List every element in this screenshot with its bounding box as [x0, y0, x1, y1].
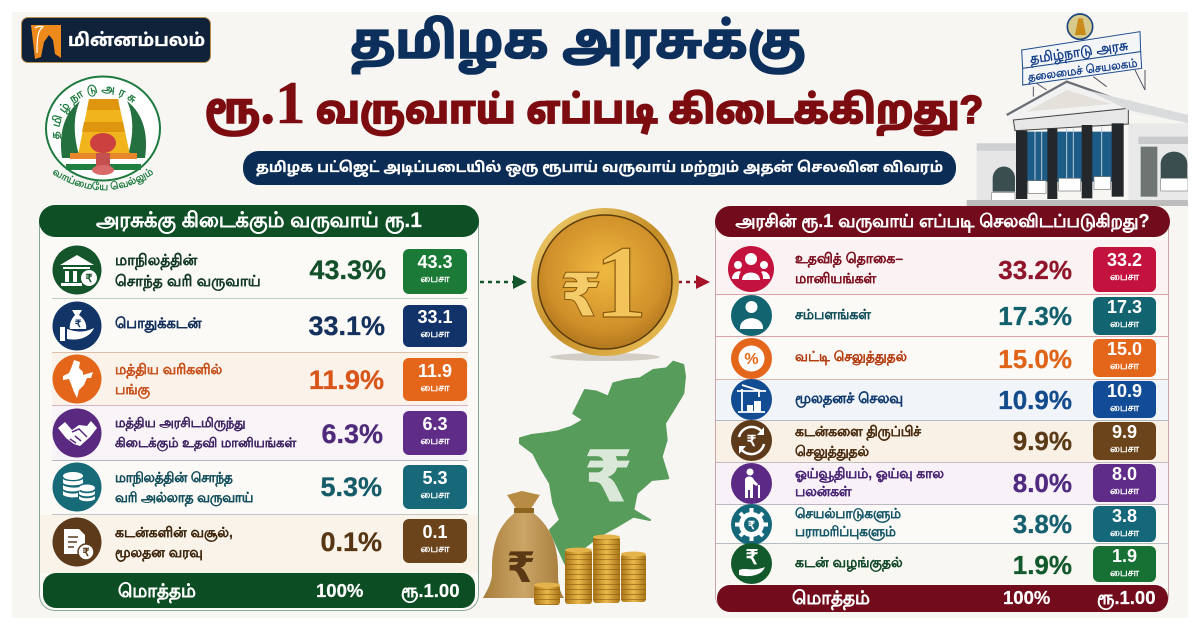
badge [1093, 546, 1156, 582]
illustration: Secretariat building: தமிழ்நாடு அரசு [1029, 37, 1130, 68]
percent: 9.9% [1013, 426, 1072, 456]
icon: gear [731, 504, 772, 544]
badge: 3.8 [1112, 506, 1137, 526]
arrow: coin to spending [678, 275, 710, 289]
label [795, 466, 944, 499]
subtitle pill [243, 151, 956, 185]
label: மானியங்கள் [795, 270, 876, 286]
icon: coin stacks [52, 462, 102, 512]
badge [1093, 422, 1156, 460]
total amount: ரூ.1.00 [1097, 587, 1156, 608]
label: மாநிலத்தின் [115, 252, 197, 269]
panel heading: spending [715, 206, 1170, 237]
label [795, 250, 903, 286]
badge: 15.0 [1107, 339, 1142, 359]
icon: crane and building [731, 379, 772, 420]
icon: people [728, 246, 774, 292]
badge: 10.9 [1107, 381, 1142, 401]
revenue row 2 [52, 299, 468, 353]
label: மத்திய அரசிடமிருந்து [115, 415, 246, 430]
revenue row 1 [52, 240, 468, 299]
badge [403, 305, 467, 347]
badge: 8.0 [1112, 464, 1137, 484]
illustration: gold one rupee coin [531, 208, 679, 361]
label: செலுத்துதல் [795, 444, 869, 459]
badge: பைசா [420, 382, 450, 394]
illustration: gold coin stacks [534, 534, 646, 605]
label [795, 506, 901, 541]
badge [1093, 247, 1156, 292]
badge: 0.1 [422, 522, 448, 542]
icon: employee [731, 295, 772, 336]
label: பலன்கள் [795, 484, 851, 499]
spending row 1 [716, 240, 1168, 295]
illustration: Tamil Nadu map: ₹ [583, 435, 633, 519]
label [115, 470, 253, 507]
illustration: Tamil Nadu map [519, 360, 686, 564]
percent: 11.9% [309, 365, 384, 395]
label: மாநிலத்தின் சொந்த [115, 470, 233, 485]
badge: பைசா [1110, 567, 1139, 579]
revenue row 5 [52, 461, 468, 515]
percent: 15.0% [998, 344, 1072, 374]
emblem: Tamil Nadu state seal [45, 76, 161, 190]
label: ஓய்வூதியம், ஓய்வு கால [795, 466, 944, 481]
percent: 10.9% [998, 385, 1072, 415]
percent: 1.9% [1013, 550, 1072, 580]
badge [1093, 297, 1156, 335]
badge: பைசா [420, 328, 450, 340]
icon: gear: ₹ [748, 520, 755, 532]
badge [1093, 381, 1156, 418]
revenue row 4 [52, 406, 468, 461]
title line 2: ரூ.1 வருவாய் எப்படி கிடைக்கிறது? [205, 70, 983, 136]
total percent: 100% [316, 580, 363, 601]
label [115, 252, 261, 292]
percent: 17.3% [998, 301, 1072, 331]
label [115, 524, 233, 562]
badge: பைசா [1110, 443, 1139, 455]
spending row 7 [716, 505, 1168, 544]
panel: spending [715, 220, 1169, 612]
label: செயல்பாடுகளும் [795, 506, 901, 521]
badge [403, 249, 467, 294]
logo wordmark: மின்னம்பலம் [68, 30, 205, 50]
spending row 2 [716, 295, 1168, 337]
emblem: Tamil Nadu state seal: த மி ழ் நா டு அ ர சு [52, 84, 136, 140]
label: சொந்த வரி வருவாய் [115, 273, 261, 290]
badge [403, 465, 467, 509]
badge: பைசா [420, 435, 450, 447]
label: கடன்களை திருப்பிச் [795, 424, 921, 439]
illustration: gold one rupee coin: ₹ [560, 261, 602, 331]
label: பொதுக்கடன் [115, 316, 201, 332]
badge: 33.2 [1107, 250, 1142, 270]
emblem: Tamil Nadu state seal: வாய்மையே வெல்லும் [53, 168, 153, 190]
badge: பைசா [420, 543, 450, 555]
total percent: 100% [1003, 587, 1050, 608]
revenue row 6 [40, 515, 478, 573]
spending row 8 [716, 544, 1168, 584]
label [115, 361, 222, 399]
label: மூலதன வரவு [115, 544, 203, 560]
icon: document with rupee [52, 518, 102, 566]
label: மூலதனச் செலவு [795, 391, 903, 407]
badge: 17.3 [1107, 297, 1142, 317]
label [115, 415, 296, 452]
label: கடன் வழங்குதல் [795, 554, 903, 570]
badge [1093, 464, 1156, 502]
icon: handshake [52, 408, 102, 458]
arrow: revenue into coin [480, 275, 527, 289]
panel: revenue sources [39, 220, 479, 611]
badge: பைசா [1110, 485, 1139, 497]
illustration: money bag: ₹ [506, 543, 536, 592]
icon: bank: ₹ [86, 273, 92, 285]
badge: பைசா [1110, 318, 1139, 330]
badge: 1.9 [1112, 546, 1137, 566]
icon: percent: % [744, 351, 759, 368]
icon: percent [731, 338, 772, 379]
icon: hand with rupee: ₹ [746, 547, 759, 569]
badge [403, 358, 467, 401]
spending row 4 [716, 380, 1168, 421]
label: கடன்களின் வசூல், [115, 524, 233, 540]
label: உதவித் தொகை– [795, 250, 903, 266]
percent: 5.3% [320, 472, 382, 502]
badge: பைசா [1110, 402, 1139, 414]
total amount: ரூ.1.00 [401, 580, 460, 601]
percent: 43.3% [309, 255, 386, 285]
panel heading: spending: அரசின் ரூ.1 வருவாய் எப்படி செலவிடப்படுகிறது? [735, 211, 1150, 231]
icon: elderly person [731, 463, 772, 504]
spending row 6 [716, 463, 1168, 505]
badge: பைசா [1110, 271, 1139, 283]
percent: 6.3% [321, 419, 383, 449]
icon: logo mark [31, 25, 61, 59]
badge [403, 519, 467, 563]
panel heading: revenue [39, 205, 479, 237]
illustration: Secretariat building: தலைமைச் செயலகம் [1027, 57, 1139, 85]
label: சம்பளங்கள் [795, 306, 871, 322]
icon: bank [52, 246, 102, 294]
total label: மொத்தம் [792, 587, 870, 608]
icon: India map [52, 354, 102, 404]
badge: 43.3 [417, 252, 453, 272]
label: பங்கு [115, 381, 150, 397]
percent: 0.1% [320, 527, 382, 557]
total label: மொத்தம் [118, 580, 196, 601]
icon: repayment cycle: ₹ [747, 433, 757, 450]
logo: Minnambalam [21, 17, 211, 63]
badge: 6.3 [422, 414, 448, 434]
icon: repayment cycle [731, 420, 772, 461]
spending total bar [717, 585, 1168, 612]
label [795, 424, 922, 461]
badge: 5.3 [422, 468, 448, 488]
badge [403, 411, 467, 455]
subtitle text: தமிழக பட்ஜெட் அடிப்படையில் ஒரு ரூபாய் வருவாய் மற்றும் அதன் செலவின விவரம் [256, 160, 943, 176]
label: மத்திய வரிகளில் [115, 361, 222, 377]
icon: document with rupee: ₹ [82, 547, 90, 559]
badge: 33.1 [417, 307, 453, 327]
badge: பைசா [1110, 527, 1139, 539]
spending row 5 [716, 421, 1168, 463]
title line 1: தமிழக அரசுக்கு [350, 14, 806, 69]
revenue row 3 [52, 353, 468, 406]
badge: 9.9 [1112, 422, 1137, 442]
illustration: money bag [483, 491, 564, 598]
illustration: gold one rupee coin: 1 [595, 225, 647, 340]
badge: பைசா [420, 273, 450, 285]
revenue total bar [43, 573, 475, 608]
badge: பைசா [420, 489, 450, 501]
label: வரி அல்லாத வருவாய் [115, 490, 253, 505]
spending row 3 [716, 337, 1168, 380]
label: வட்டி செலுத்துதல் [795, 349, 907, 364]
badge [1093, 339, 1156, 377]
icon: money bag in hand: ₹ [75, 319, 82, 330]
label: பராமரிப்புகளும் [795, 524, 896, 539]
badge: பைசா [1110, 360, 1139, 372]
badge: 11.9 [418, 361, 452, 381]
percent: 3.8% [1013, 509, 1072, 539]
icon: money bag in hand [52, 302, 102, 350]
percent: 8.0% [1013, 468, 1072, 498]
percent: 33.2% [998, 255, 1072, 285]
icon: hand with rupee [731, 543, 772, 584]
label: கிடைக்கும் உதவி மானியங்கள் [115, 435, 296, 450]
badge [1093, 506, 1156, 542]
panel heading: revenue: அரசுக்கு கிடைக்கும் வருவாய் ரூ.1 [96, 209, 422, 232]
illustration: Secretariat building [966, 13, 1188, 206]
percent: 33.1% [308, 311, 385, 341]
